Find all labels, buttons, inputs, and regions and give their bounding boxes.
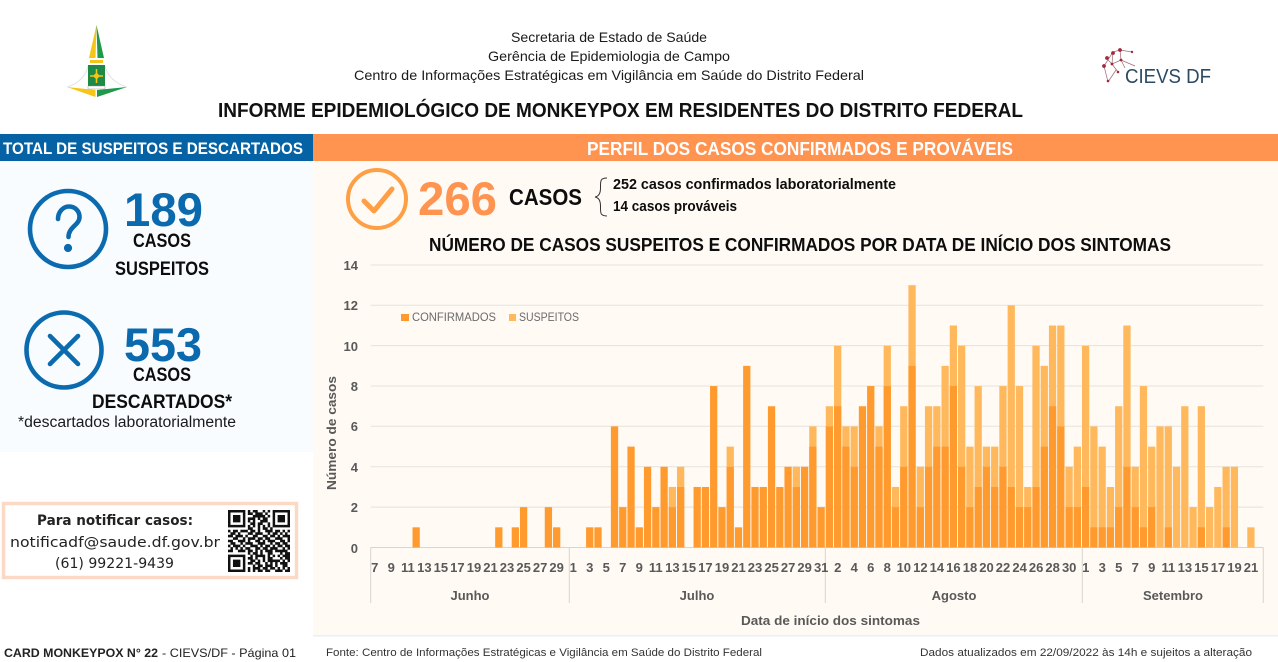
stat: descartados: DESCARTADOS* (92, 392, 233, 413)
stat: 266 casos: 266 (418, 172, 497, 225)
y axis labels: 12 (344, 298, 358, 313)
footer: card number: CARD MONKEYPOX N° 22 (4, 646, 158, 660)
x axis day labels: 17 (450, 560, 465, 575)
x axis day labels: 23 (748, 560, 762, 575)
x axis day labels: 7 (619, 560, 626, 575)
x axis day labels: 28 (1045, 560, 1060, 575)
footer: card number (4, 646, 296, 660)
x axis title: Data de início dos sintomas (741, 613, 920, 628)
title: INFORME EPIDEMIOLÓGICO DE MONKEYPOX EM RESIDENTES DO DISTRITO FEDERAL (218, 98, 1023, 122)
x axis day labels: 3 (586, 560, 593, 575)
x axis day labels: 27 (781, 560, 795, 575)
brace (595, 178, 607, 216)
x axis day labels: 9 (388, 560, 395, 575)
x axis day labels: 21 (483, 560, 498, 575)
x axis day labels: 22 (996, 560, 1010, 575)
header: institution lines: Secretaria de Estado de Saúde (511, 29, 707, 45)
bars: suspeitos (669, 285, 1255, 548)
stat: 266 casos (418, 172, 582, 225)
text: case breakdown (613, 177, 896, 215)
chart title: NÚMERO DE CASOS SUSPEITOS E CONFIRMADOS POR DATA DE INÍCIO DOS SINTOMAS (429, 234, 1171, 255)
x axis month labels: Julho (680, 588, 714, 603)
x axis day labels: 18 (963, 560, 977, 575)
x axis month labels: Agosto (932, 588, 976, 603)
x axis day labels: 6 (867, 560, 874, 575)
icon: QR code (228, 511, 290, 571)
x axis day labels: 26 (1029, 560, 1043, 575)
heading: perfil dos casos (313, 134, 1278, 161)
y axis labels (344, 258, 359, 556)
x axis day labels: 5 (1115, 560, 1122, 575)
x axis day labels: 10 (897, 560, 911, 575)
x axis day labels: 15 (1194, 560, 1209, 575)
logo: Governo do Distrito Federal (67, 25, 127, 97)
x axis day labels: 27 (533, 560, 547, 575)
x axis day labels: 25 (516, 560, 531, 575)
x axis day labels: 3 (1099, 560, 1106, 575)
x axis day labels: 1 (570, 560, 577, 575)
x axis day labels: 19 (467, 560, 481, 575)
x axis day labels: 8 (884, 560, 891, 575)
stat: descartados: CASOS (133, 365, 191, 386)
x axis day labels: 11 (649, 560, 663, 575)
x axis day labels: 15 (682, 560, 696, 575)
heading: total de suspeitos e descartados (0, 134, 313, 161)
stat: suspeitos (115, 183, 209, 280)
x axis day labels: 14 (930, 560, 945, 575)
x axis day labels: 2 (834, 560, 841, 575)
panel: notification box: Para notificar casos: (37, 513, 193, 529)
x axis day labels: 1 (1082, 560, 1089, 575)
panel: notification box: notificadf@saude.df.gov.br (10, 535, 220, 551)
stat: descartados: *descartados laboratorialmente (18, 414, 236, 431)
stat: suspeitos: SUSPEITOS (115, 259, 209, 280)
x axis day labels: 29 (797, 560, 812, 575)
icon: cross circle (26, 312, 102, 388)
stat: descartados: 553 (124, 318, 202, 371)
logo: CIEVS DF (1102, 48, 1211, 88)
y axis labels: 4 (351, 460, 359, 475)
x axis day labels: 17 (698, 560, 713, 575)
y axis labels: 8 (351, 379, 358, 394)
bar chart (324, 258, 1263, 628)
x axis day labels: 4 (851, 560, 859, 575)
x axis day labels: 30 (1062, 560, 1076, 575)
panel: left background (0, 161, 313, 452)
header: institution lines: Centro de Informações Estratégicas em Vigilância em Saúde do Distrito Federal (354, 67, 864, 83)
x axis day labels: 13 (665, 560, 680, 575)
icon: question mark circle (30, 191, 106, 267)
legend: SUSPEITOS (519, 310, 579, 324)
legend: CONFIRMADOS (412, 310, 496, 324)
y axis labels: 6 (351, 419, 358, 434)
x axis day labels: 11 (401, 560, 415, 575)
stat: 266 casos: CASOS (509, 184, 582, 210)
y axis labels: 14 (344, 258, 359, 273)
x axis day labels: 29 (549, 560, 564, 575)
text: case breakdown: 14 casos prováveis (613, 199, 737, 215)
x axis day labels: 11 (1162, 560, 1175, 575)
heading: perfil dos casos: PERFIL DOS CASOS CONFIRMADOS E PROVÁVEIS (587, 138, 1013, 159)
x axis day labels: 19 (1227, 560, 1242, 575)
x axis month labels: Junho (450, 588, 490, 603)
footer: card number: - CIEVS/DF - Página 01 (162, 646, 296, 660)
stat: suspeitos: CASOS (133, 231, 191, 252)
text: case breakdown: 252 casos confirmados laboratorialmente (613, 177, 896, 193)
footer: source: Fonte: Centro de Informações Estratégicas e Vigilância em Saúde do Distrito Federal (326, 647, 762, 659)
x axis day labels: 23 (500, 560, 514, 575)
x axis day labels: 5 (603, 560, 610, 575)
x axis day labels (371, 560, 1258, 575)
x axis day labels: 9 (636, 560, 643, 575)
x axis day labels: 21 (731, 560, 746, 575)
y axis labels: 0 (351, 541, 358, 556)
x axis day labels: 12 (913, 560, 928, 575)
header: institution lines: Gerência de Epidemiologia de Campo (488, 48, 730, 64)
logo: CIEVS DF: CIEVS DF (1125, 66, 1211, 88)
y axis title: Número de casos (324, 376, 339, 490)
x axis day labels: 31 (814, 560, 828, 575)
panel: right background (313, 160, 1278, 635)
panel: notification box (4, 504, 296, 578)
x axis day labels: 20 (979, 560, 994, 575)
x axis day labels: 9 (1148, 560, 1155, 575)
x axis day labels: 7 (371, 560, 378, 575)
x axis day labels: 24 (1012, 560, 1028, 575)
y axis labels: 2 (351, 500, 358, 515)
bars: confirmados (413, 366, 1230, 548)
x axis day labels: 13 (417, 560, 432, 575)
x axis day labels: 7 (1132, 560, 1139, 575)
heading: total de suspeitos e descartados: TOTAL DE SUSPEITOS E DESCARTADOS (3, 139, 303, 158)
x axis day labels: 25 (764, 560, 779, 575)
legend (401, 310, 579, 324)
x axis day labels: 21 (1244, 560, 1258, 575)
x axis month labels (450, 588, 1203, 603)
x axis day labels: 19 (715, 560, 729, 575)
footer: update date: Dados atualizados em 22/09/2022 às 14h e sujeitos a alteração (920, 647, 1252, 659)
stat: suspeitos: 189 (124, 183, 203, 236)
icon: check circle (348, 170, 406, 228)
x axis day labels: 17 (1211, 560, 1225, 575)
panel: notification box: (61) 99221-9439 (55, 556, 174, 572)
y axis labels: 10 (344, 339, 358, 354)
x axis day labels: 16 (946, 560, 961, 575)
x axis month labels: Setembro (1143, 588, 1203, 603)
header: institution lines (354, 29, 864, 83)
x axis day labels: 13 (1178, 560, 1192, 575)
stat: descartados (18, 318, 236, 431)
x axis day labels: 15 (434, 560, 448, 575)
